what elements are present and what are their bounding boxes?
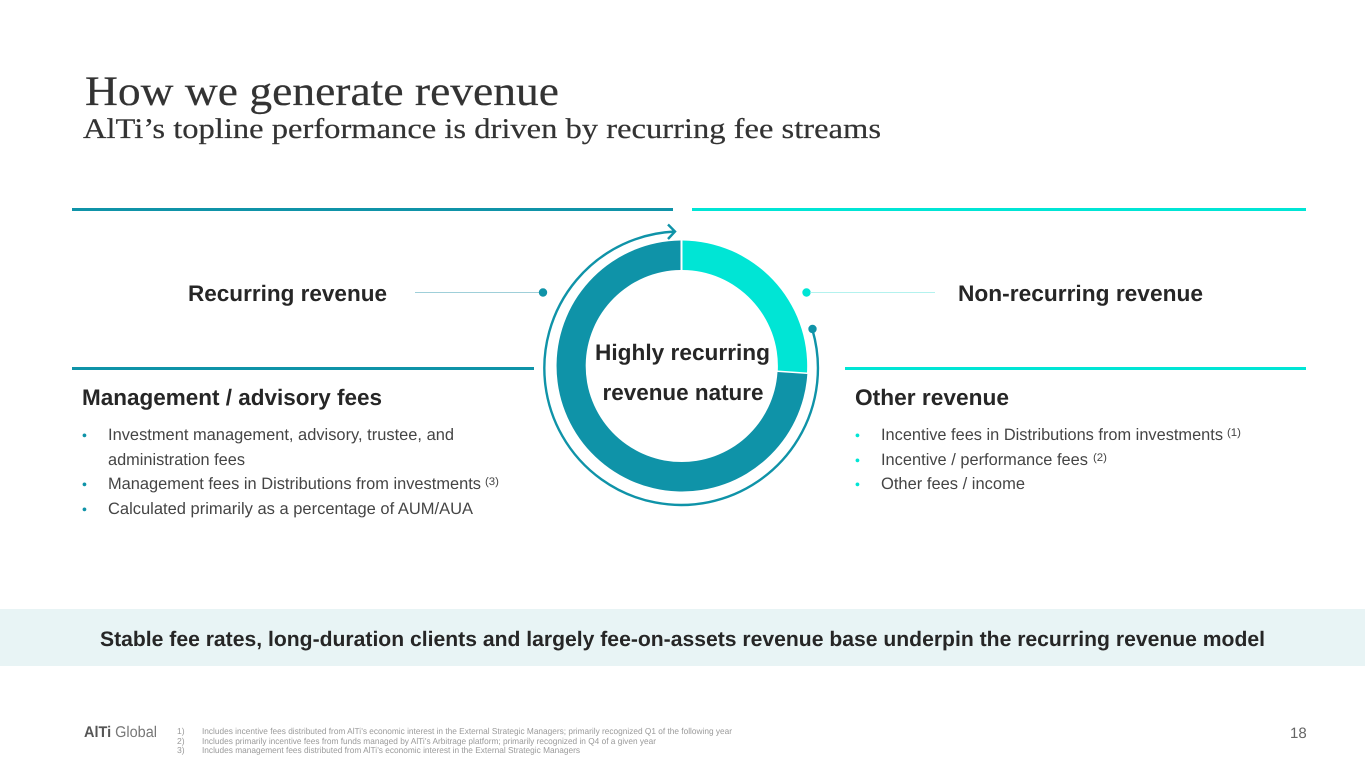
non-recurring revenue label: Non-recurring revenue bbox=[958, 281, 1203, 306]
panel: other revenue: Other revenue bbox=[855, 385, 1009, 410]
panel: other revenue: Incentive / performance fees bbox=[881, 451, 1088, 469]
callout band: Stable fee rates, long-duration clients and largely fee-on-assets revenue base underpin the recurring revenue model bbox=[100, 628, 1265, 651]
panel: management fees: Management / advisory fees bbox=[82, 385, 382, 410]
recurring segment bbox=[557, 240, 807, 491]
donut centre text bbox=[595, 340, 770, 405]
recurring top rule bbox=[72, 208, 673, 211]
panel: management fees: administration fees bbox=[108, 451, 245, 469]
panel: management fees: • bbox=[82, 476, 87, 492]
footnotes: 3) bbox=[177, 745, 185, 755]
circular arrow bbox=[544, 224, 818, 505]
page number: 18 bbox=[1290, 725, 1307, 742]
donut centre text: revenue nature bbox=[602, 380, 764, 405]
recurring revenue label bbox=[188, 281, 547, 306]
panel: management fees: Investment management, advisory, trustee, and bbox=[108, 426, 454, 444]
panel: management fees bbox=[72, 367, 534, 518]
panel: other revenue: • bbox=[855, 476, 860, 492]
title: How we generate revenue bbox=[85, 69, 559, 115]
footnotes: Includes primarily incentive fees from funds managed by AlTi’s Arbitrage platform; primarily recognized in Q4 of a given year bbox=[202, 736, 656, 746]
footnotes: Includes incentive fees distributed from AlTi’s economic interest in the External Strategic Managers; primarily recognized Q1 of the following year bbox=[202, 726, 732, 736]
panel: management fees: (3) bbox=[485, 476, 499, 488]
panel: management fees: • bbox=[82, 427, 87, 443]
subtitle: AlTi’s topline performance is driven by recurring fee streams bbox=[83, 114, 881, 145]
panel: other revenue: (2) bbox=[1093, 452, 1107, 464]
panel: other revenue bbox=[845, 367, 1306, 493]
non-recurring revenue label bbox=[802, 281, 1203, 306]
footnotes bbox=[177, 726, 732, 755]
panel: management fees: • bbox=[82, 501, 87, 517]
footnotes: 1) bbox=[177, 726, 185, 736]
panel: other revenue: • bbox=[855, 427, 860, 443]
recurring revenue label: Recurring revenue bbox=[188, 281, 387, 306]
non-recurring segment bbox=[682, 240, 807, 372]
donut chart bbox=[557, 240, 807, 491]
panel: other revenue: (1) bbox=[1227, 427, 1241, 439]
footnotes: 2) bbox=[177, 736, 185, 746]
panel: management fees: Management fees in Distributions from investments bbox=[108, 475, 481, 493]
donut centre text: Highly recurring bbox=[595, 340, 770, 365]
panel: other revenue: Other fees / income bbox=[881, 475, 1025, 493]
non-recurring top rule bbox=[692, 208, 1306, 211]
panel: management fees: Calculated primarily as a percentage of AUM/AUA bbox=[108, 500, 473, 518]
footnotes: Includes management fees distributed from AlTi’s economic interest in the External Strategic Managers bbox=[202, 745, 580, 755]
logo: AlTi Global bbox=[84, 724, 157, 741]
panel: other revenue: • bbox=[855, 452, 860, 468]
panel: other revenue: Incentive fees in Distributions from investments bbox=[881, 426, 1223, 444]
callout band bbox=[0, 609, 1365, 666]
